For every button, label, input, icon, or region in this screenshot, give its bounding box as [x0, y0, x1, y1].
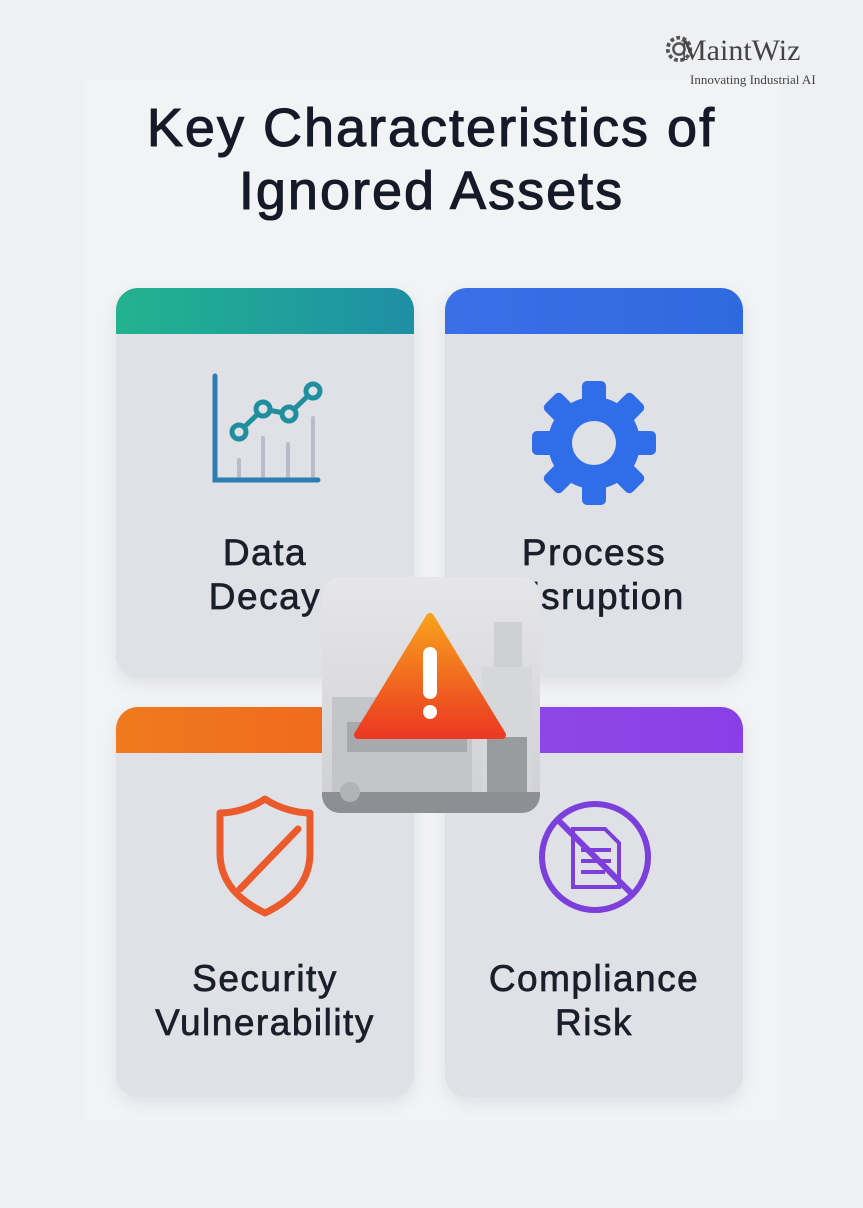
panel: process disruption: Disruption [503, 576, 685, 617]
center image: warning over machine [322, 577, 540, 813]
panel: compliance risk: Compliance [489, 958, 699, 999]
logo: MaintWiz [680, 34, 800, 67]
title: Ignored Assets [239, 161, 624, 221]
icon: shield [216, 796, 314, 916]
logo [666, 34, 816, 87]
panel: data decay: Decay [209, 576, 321, 617]
icon: gear [532, 381, 656, 505]
panel: security vulnerability: Security [192, 958, 338, 999]
panel: background [85, 80, 780, 1120]
icon: no document [539, 801, 651, 913]
icon: chart [212, 374, 322, 482]
logo: Innovating Industrial AI [690, 72, 816, 87]
panel: process disruption [445, 288, 743, 678]
panel: process disruption: Process [522, 532, 666, 573]
panel: compliance risk: Risk [555, 1002, 633, 1043]
panel: compliance risk [445, 707, 743, 1097]
panel: data decay [116, 288, 414, 678]
panel: data decay: Data [223, 532, 307, 573]
title: Key Characteristics of [147, 98, 716, 158]
panel: security vulnerability: Vulnerability [155, 1002, 375, 1043]
title [147, 98, 716, 221]
panel: security vulnerability [116, 707, 414, 1097]
